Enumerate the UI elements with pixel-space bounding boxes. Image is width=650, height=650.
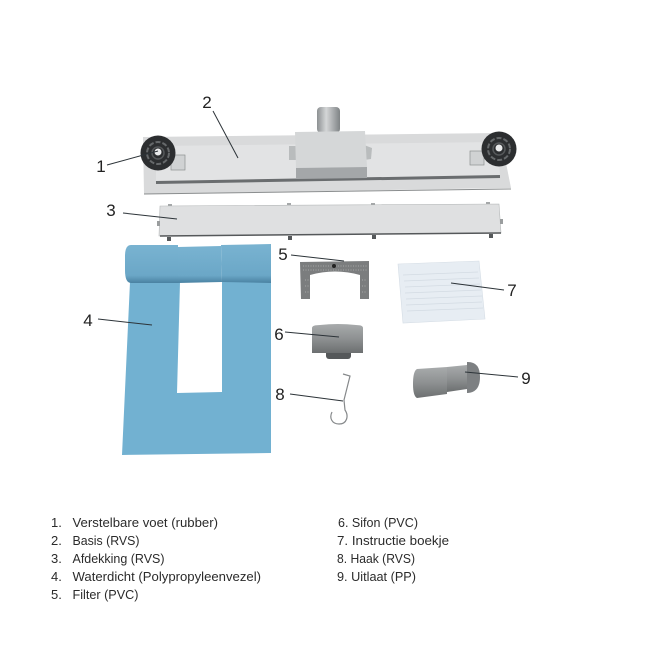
legend: left column: Verstelbare voet (rubber) <box>72 515 218 530</box>
legend: right column: 8. Haak (RVS) <box>337 551 415 566</box>
legend: left column: 4. <box>51 569 62 584</box>
part number labels: 1 <box>96 157 106 176</box>
legend: left column: 1. <box>51 515 62 530</box>
part number labels: 2 <box>202 93 212 112</box>
legend: left column: Basis (RVS) <box>72 533 140 548</box>
part 1: adjustable foot right <box>482 132 516 166</box>
part 1: adjustable foot left <box>140 136 176 170</box>
part number labels: 8 <box>275 385 285 404</box>
part 5: filter <box>300 261 369 299</box>
part 8: hook <box>331 374 350 424</box>
part 7: instruction booklet <box>398 261 485 323</box>
part number labels <box>83 93 531 404</box>
legend: left column: 2. <box>51 533 62 548</box>
part number labels: 9 <box>521 369 531 388</box>
part 6: siphon <box>312 324 363 359</box>
legend: left column: 5. <box>51 587 62 602</box>
part number labels: 3 <box>106 201 116 220</box>
legend: left column: Waterdicht (Polypropyleenvezel) <box>72 569 261 584</box>
part 2: base plate <box>143 107 511 194</box>
part number labels: 7 <box>507 281 517 300</box>
leader lines <box>98 111 518 401</box>
legend: left column <box>51 515 261 602</box>
part number labels: 5 <box>278 245 288 264</box>
legend: right column: 9. Uitlaat (PP) <box>337 569 416 584</box>
legend: left column: 3. <box>51 551 62 566</box>
part 9: outlet <box>413 362 480 398</box>
legend: right column <box>337 515 449 584</box>
part number labels: 6 <box>274 325 284 344</box>
part 4: waterproof sheet <box>122 244 271 455</box>
legend: right column: 6. Sifon (PVC) <box>338 515 418 530</box>
part 3: cover <box>157 202 503 241</box>
legend: left column: Filter (PVC) <box>72 587 138 602</box>
legend: left column: Afdekking (RVS) <box>72 551 164 566</box>
legend: right column: 7. Instructie boekje <box>337 533 449 548</box>
part number labels: 4 <box>83 311 93 330</box>
